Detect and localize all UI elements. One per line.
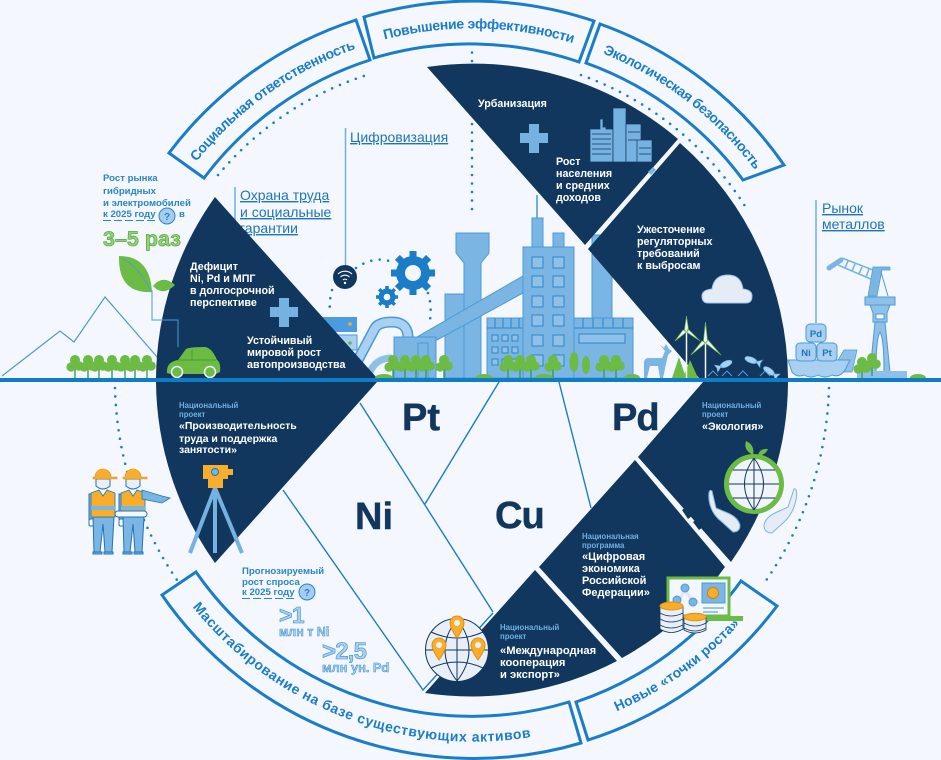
label: labour protection (235, 187, 332, 236)
icon: question mark (299, 584, 315, 600)
icon: question mark: ? (304, 588, 310, 599)
metal label: Pd: Pd (612, 397, 659, 439)
icon: green car (167, 347, 220, 378)
sector: productivity project (156, 382, 377, 563)
label: metals market: Рынок (822, 200, 864, 216)
ring segment: social responsibility (166, 18, 372, 180)
callout: forecast demand growth: >2,5 (322, 638, 367, 665)
label: metals market (816, 200, 885, 323)
sector: urbanization: населения (556, 168, 612, 180)
icon: plus (270, 298, 298, 327)
callout: hybrid and electric car market: 3–5 раз (103, 227, 181, 251)
ring segment: scaling existing assets (160, 570, 583, 760)
icon: plus (520, 124, 548, 153)
sector: deficit (156, 197, 377, 378)
metal label: Pt: Pt (402, 397, 440, 439)
icon: big gear (391, 251, 435, 295)
sector: deficit: Устойчивый (247, 335, 312, 347)
sector: urbanization: доходов (556, 192, 601, 204)
ring segment: new growth points: Новые «точки роста» (614, 621, 738, 711)
ring segment: scaling existing assets: Масштабирование на базе существующих активов (193, 602, 530, 744)
icon: wifi (333, 265, 357, 289)
sector: ecology project: «Экология» (702, 421, 763, 433)
ring segment: ecological safety (584, 22, 786, 182)
sector: urbanization (427, 64, 678, 245)
callout: hybrid and electric car market: к 2025 году (103, 209, 156, 220)
metal label: Cu: Cu (495, 495, 544, 537)
callout: forecast demand growth (242, 566, 389, 675)
sector: international cooperation project: кооперация (500, 657, 565, 669)
callout: forecast demand growth: Прогнозируемый (242, 566, 324, 577)
icon: cargo ship with metals: Pd (810, 329, 822, 340)
factory (358, 195, 633, 378)
sector: emission requirements: требований (637, 248, 700, 260)
icon: cargo ship with metals: Ni (801, 348, 811, 359)
small fragment in the gap (648, 167, 656, 175)
callout: forecast demand growth: рост спроса (242, 577, 300, 588)
icon: cargo ship with metals: Pt (822, 348, 833, 359)
metal label: Ni: Ni (355, 496, 393, 538)
sector: digital economy programme: «Цифровая (582, 551, 645, 563)
sector: productivity project: проект (179, 410, 205, 419)
icon: question mark: ? (164, 212, 170, 223)
icon: globe with pins (426, 616, 488, 682)
thin metal division lines (283, 382, 591, 690)
sector: deficit: перспективе (190, 297, 257, 309)
sector: international cooperation project: и экспорт» (500, 669, 560, 681)
sector: urbanization: Урбанизация (478, 98, 547, 110)
icon: deer (644, 344, 672, 378)
ring segment: efficiency: Повышение эффективности (383, 18, 574, 43)
callout: hybrid and electric car market (103, 173, 191, 251)
sector: emission requirements: Ужесточение (637, 224, 705, 236)
callout: hybrid and electric car market: в (179, 209, 185, 220)
sector: emission requirements: регуляторных (637, 236, 712, 248)
dotted guide lines (115, 44, 829, 582)
callout: forecast demand growth: к 2025 году (242, 587, 295, 598)
icon: wind turbines (675, 316, 721, 378)
sector: international cooperation project: Национальный (500, 623, 559, 632)
sector: productivity project: «Производительность (179, 420, 297, 432)
sector: deficit: Ni, Pd и МПГ (190, 273, 255, 285)
label: labour protection: и социальные (240, 204, 332, 220)
sector: ecology project (638, 382, 797, 562)
factory tree row (375, 352, 640, 382)
label: labour protection: гарантии (240, 220, 298, 236)
icon: port crane (829, 258, 907, 378)
sector: digital economy programme: Федерации» (582, 587, 650, 599)
left tree row (66, 355, 156, 378)
sector: urbanization: и средних (556, 180, 610, 192)
sector: deficit: Дефицит (190, 261, 238, 273)
sector: productivity project: занятости» (179, 444, 237, 456)
sector: emission requirements (588, 143, 788, 378)
sector: international cooperation project: проект (500, 632, 526, 641)
label: digitalization: Цифровизация (350, 129, 448, 145)
sector: productivity project: труда и поддержка (179, 433, 278, 445)
icon: globe in hands (709, 441, 797, 533)
sector: digital economy programme: программа (582, 541, 625, 550)
icon: cloud (702, 275, 752, 303)
callout: forecast demand growth: >1 (279, 602, 305, 628)
server rack (322, 317, 357, 350)
sector: digital economy programme (539, 460, 725, 658)
sector: ecology project: проект (702, 410, 728, 419)
sector: productivity project: Национальный (179, 401, 238, 410)
label: digitalization (346, 128, 448, 266)
ring segment: social responsibility: Социальная ответственность (191, 44, 355, 160)
sector: digital economy programme: экономика (582, 563, 641, 575)
icon: tripod (190, 465, 242, 553)
icon: water waves (708, 371, 770, 376)
sector: deficit: в долгосрочной (190, 285, 275, 297)
sector: deficit: мировой рост (247, 347, 321, 359)
port trees (853, 353, 926, 382)
gap fragments between sectors (682, 507, 703, 530)
callout: forecast demand growth: млн т Ni (279, 625, 329, 639)
icon: workers (89, 469, 170, 554)
ring segment: efficiency (362, 0, 596, 64)
icon: leaves with cable (119, 256, 178, 347)
callout: hybrid and electric car market: и электромобилей (103, 198, 191, 209)
sector: international cooperation project: «Международная (500, 645, 596, 657)
sector: emission requirements: к выбросам (637, 260, 701, 272)
ring segment: ecological safety: Экологическая безопасность (604, 46, 758, 169)
callout: hybrid and electric car market: Рост рынка (103, 173, 158, 184)
icon: laptop with coins (660, 578, 743, 633)
ring segment: new growth points (574, 578, 780, 742)
icon: fish (714, 354, 780, 381)
label: labour protection: Охрана труда (240, 187, 329, 203)
sector: ecology project: Национальный (702, 401, 761, 410)
icon: small gear (376, 286, 398, 308)
sector: deficit: автопроизводства (247, 359, 346, 371)
icon: city (590, 108, 652, 162)
horizon line (0, 378, 941, 382)
icon: cargo ship with metals (788, 324, 857, 377)
sector: international cooperation project (425, 570, 617, 696)
sector: digital economy programme: Национальная (582, 532, 639, 541)
sector: urbanization: Рост (556, 156, 580, 168)
callout: hybrid and electric car market: гибридных (103, 186, 157, 197)
sector: digital economy programme: Российской (582, 575, 646, 587)
label: metals market: металлов (822, 216, 885, 232)
callout: forecast demand growth: млн ун. Pd (322, 660, 389, 675)
icon: fir trees (672, 357, 698, 378)
mountains (2, 297, 158, 376)
